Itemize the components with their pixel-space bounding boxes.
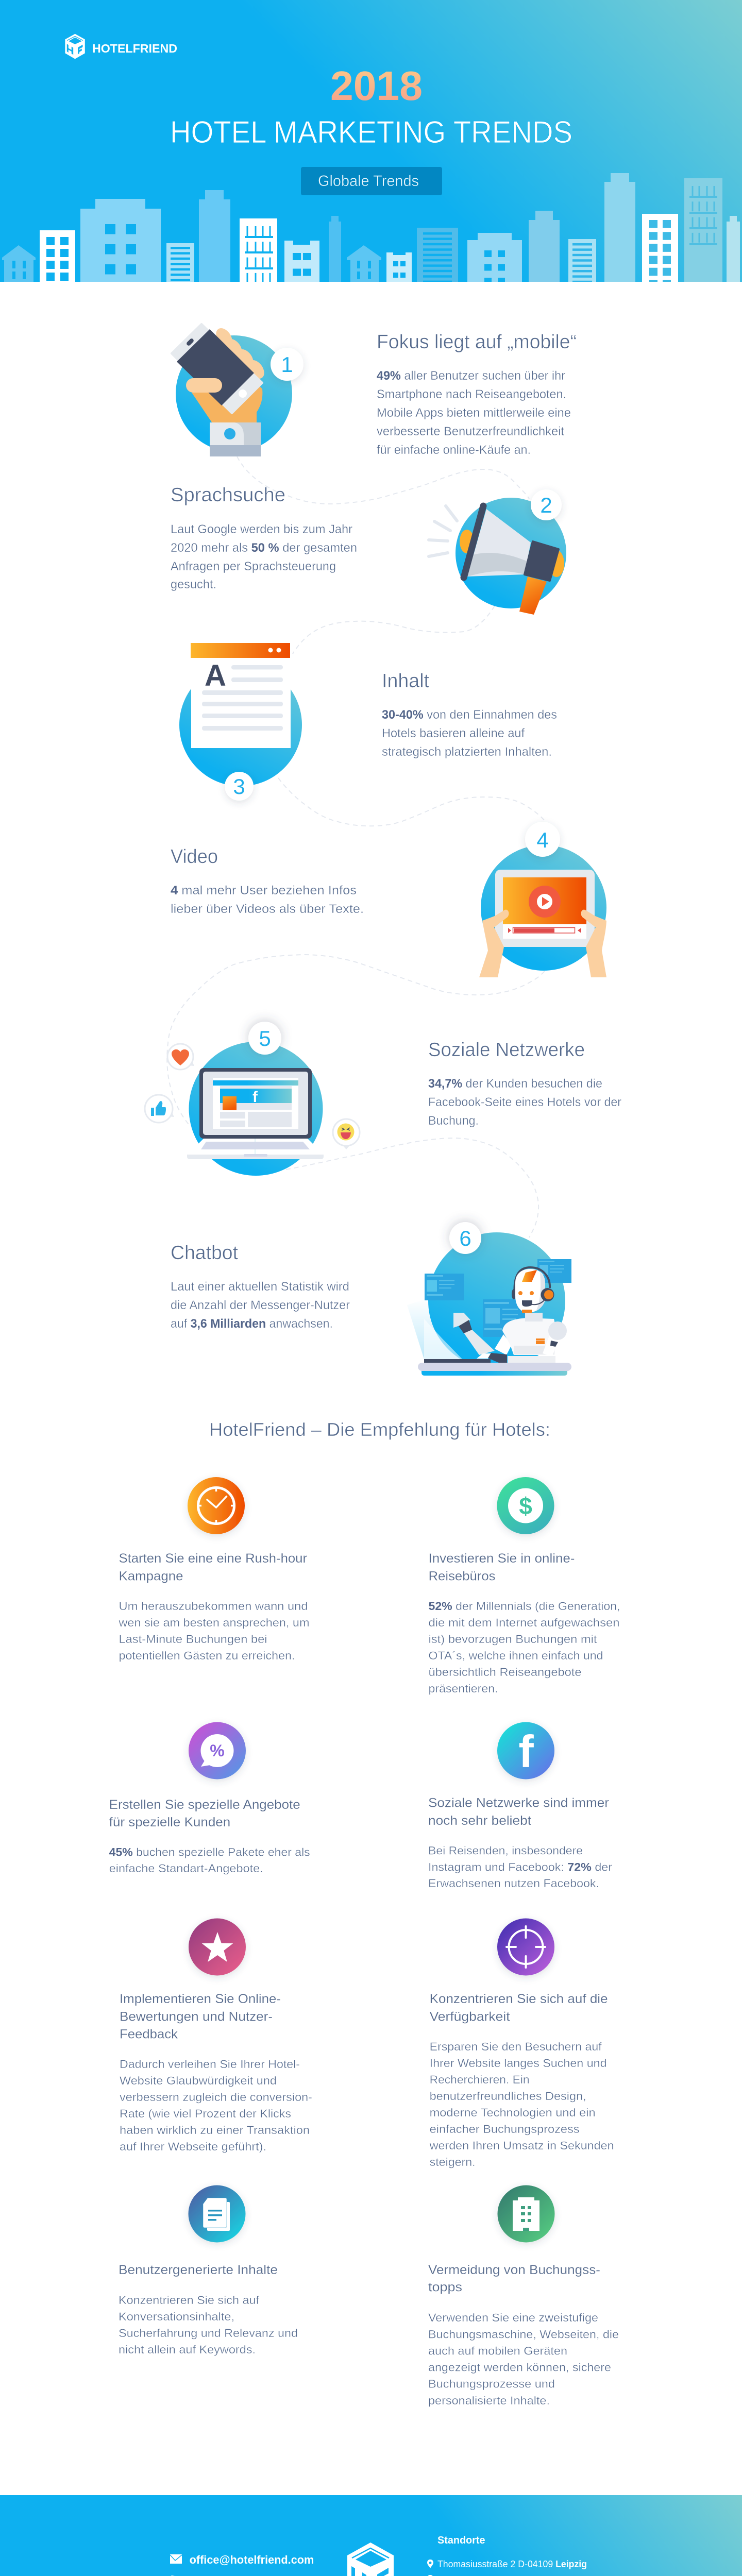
text block: präsentieren. bbox=[429, 1682, 498, 1695]
text block: strategisch platzierten Inhalten. bbox=[382, 745, 552, 759]
panel: trend 3 Inhalt bbox=[179, 643, 557, 801]
text block: Buchung. bbox=[428, 1114, 479, 1128]
heading: Vermeidung von Buchungss- bbox=[428, 2263, 600, 2277]
text block: Smartphone nach Reiseangeboten. bbox=[377, 387, 566, 401]
heading: recommendations: HotelFriend – Die Empfehlung für Hotels: bbox=[209, 1419, 550, 1440]
number badge 5 bbox=[248, 1022, 281, 1055]
logo: HotelFriend bbox=[65, 34, 177, 59]
text block: wen sie am besten ansprechen, um bbox=[118, 1616, 309, 1629]
number badge 4 bbox=[525, 822, 560, 857]
illustration: tablet with video bbox=[479, 845, 606, 977]
text block: lieber über Videos als über Texte. bbox=[171, 902, 364, 916]
text block: gesucht. bbox=[171, 578, 216, 591]
text block: Sucherfahrung und Relevanz und bbox=[119, 2327, 298, 2340]
text block: die mit dem Internet aufgewachsen bbox=[429, 1616, 619, 1629]
text block: 34,7% der Kunden besuchen die bbox=[428, 1077, 602, 1091]
text block bbox=[118, 1600, 309, 1662]
number badge 1: 1 bbox=[281, 352, 293, 377]
text block: Konzentrieren Sie sich auf bbox=[119, 2294, 260, 2307]
text block: Mobile Apps bieten mittlerweile eine bbox=[377, 406, 571, 420]
text block: Verwenden Sie eine zweistufige bbox=[428, 2311, 598, 2324]
text block bbox=[120, 2058, 312, 2153]
text block: Laut einer aktuellen Statistik wird bbox=[171, 1280, 349, 1294]
panel: recommendation availability bbox=[429, 1919, 614, 2168]
text block: Erwachsenen nutzen Facebook. bbox=[428, 1877, 599, 1890]
text block: moderne Technologien und ein bbox=[430, 2106, 596, 2119]
text block: 30-40% von den Einnahmen des bbox=[382, 708, 557, 722]
locations heading: Standorte bbox=[437, 2535, 485, 2546]
heading: Benutzergenerierte Inhalte bbox=[119, 2263, 278, 2277]
text block: Instagram und Facebook: 72% der bbox=[428, 1861, 612, 1874]
year: 2018 bbox=[330, 63, 423, 109]
heading bbox=[109, 1798, 300, 1829]
text block: einfacher Buchungsprozess bbox=[430, 2123, 580, 2136]
text block: Website Glaubwürdigkeit und bbox=[120, 2074, 277, 2087]
text block: für einfache online-Käufe an. bbox=[377, 443, 531, 457]
text block: Recherchieren. Ein bbox=[430, 2073, 530, 2086]
text block bbox=[429, 1600, 620, 1695]
illustration: chatbot robot at desk bbox=[407, 1232, 571, 1376]
text block: angezeigt werden können, sichere bbox=[428, 2361, 611, 2374]
icon: percent bubble bbox=[189, 1722, 246, 1780]
icon: percent bubble: % bbox=[210, 1741, 225, 1760]
text block: potentiellen Gästen zu erreichen. bbox=[119, 1649, 295, 1662]
heading: Fokus liegt auf „mobile“ bbox=[377, 331, 577, 353]
text block: 2020 mehr als 50 % der gesamten bbox=[171, 541, 357, 555]
button: Globale Trends bbox=[301, 167, 442, 195]
heading: Video bbox=[171, 846, 218, 868]
heading: Investieren Sie in online- bbox=[429, 1551, 575, 1566]
illustration: document: A bbox=[205, 659, 226, 692]
text block: Buchungsmaschine, Webseiten, die bbox=[428, 2328, 619, 2341]
icon: facebook bbox=[497, 1722, 554, 1780]
text block: 52% der Millennials (die Generation, bbox=[429, 1600, 620, 1613]
connector dashes bbox=[167, 456, 545, 1238]
heading bbox=[428, 1796, 609, 1828]
panel: trend 6 Chatbot bbox=[171, 1222, 571, 1376]
text block: Ihrer Website langes Suchen und bbox=[430, 2057, 607, 2070]
panel: recommendation user-generated content bbox=[119, 2185, 298, 2356]
text block bbox=[428, 2311, 619, 2407]
icon: thumb bubble bbox=[145, 1095, 174, 1123]
panel: recommendation online travel agencies bbox=[429, 1477, 620, 1695]
heading: Soziale Netzwerke bbox=[428, 1039, 585, 1061]
text block bbox=[171, 884, 364, 916]
heading bbox=[120, 1992, 281, 2042]
icon: laughing emoji bubble bbox=[333, 1119, 360, 1149]
text block: Konversationsinhalte, bbox=[119, 2310, 234, 2323]
text block: übersichtlich Reiseangebote bbox=[429, 1666, 581, 1679]
text block: Hotels basieren alleine auf bbox=[382, 726, 525, 740]
number badge 1 bbox=[271, 348, 303, 381]
skyline bbox=[2, 173, 740, 282]
heading bbox=[429, 1551, 575, 1584]
heading: Inhalt bbox=[382, 670, 429, 692]
text block: benutzerfreundliches Design, bbox=[430, 2090, 586, 2103]
icon: clock bbox=[188, 1477, 245, 1534]
text block: verbesserte Benutzerfreundlichkeit bbox=[377, 425, 564, 438]
heading: Konzentrieren Sie sich auf die bbox=[430, 1992, 608, 2006]
text block: auf 3,6 Milliarden anwachsen. bbox=[171, 1317, 333, 1331]
heading: noch sehr beliebt bbox=[428, 1814, 531, 1828]
heading bbox=[428, 2263, 600, 2295]
text block: auf Ihrer Webseite geführt). bbox=[120, 2140, 266, 2153]
illustration: laptop with Facebook page: f bbox=[252, 1089, 258, 1106]
text block: werden Ihren Umsatz in Sekunden bbox=[429, 2139, 614, 2152]
illustration: document bbox=[179, 643, 302, 786]
logo: HF cube bbox=[347, 2543, 394, 2576]
panel: recommendation social networks bbox=[428, 1722, 612, 1890]
panel: trend 4 Video bbox=[171, 822, 606, 977]
panel: recommendation booking stops bbox=[428, 2185, 619, 2407]
text block: Bei Reisenden, insbesondere bbox=[428, 1844, 583, 1857]
text block: Laut Google werden bis zum Jahr bbox=[171, 522, 352, 536]
text block: 49% aller Benutzer suchen über ihr bbox=[377, 369, 565, 383]
text block bbox=[429, 2040, 614, 2168]
illustration: megaphone bbox=[429, 498, 566, 615]
text block: Anfragen per Sprachsteuerung bbox=[171, 560, 336, 573]
text block bbox=[428, 1077, 621, 1128]
heading: Bewertungen und Nutzer- bbox=[120, 2009, 273, 2024]
text block bbox=[171, 1280, 350, 1331]
heading bbox=[119, 1551, 307, 1584]
text block: einfache Standart-Angebote. bbox=[109, 1862, 263, 1875]
heading: Soziale Netzwerke sind immer bbox=[428, 1796, 609, 1810]
text block: Facebook-Seite eines Hotels vor der bbox=[428, 1095, 621, 1109]
heading: Chatbot bbox=[171, 1242, 238, 1264]
text block: Ersparen Sie den Besuchern auf bbox=[430, 2040, 602, 2053]
heading: topps bbox=[428, 2280, 462, 2295]
text block: die Anzahl der Messenger-Nutzer bbox=[171, 1298, 350, 1312]
icon: heart bubble bbox=[167, 1044, 194, 1070]
number badge 5: 5 bbox=[259, 1026, 271, 1050]
panel: footer bbox=[0, 2495, 742, 2576]
icon: star bbox=[189, 1919, 246, 1975]
icon: documents bbox=[189, 2185, 245, 2242]
number badge 4: 4 bbox=[536, 828, 549, 852]
illustration: laptop with Facebook page bbox=[187, 1042, 324, 1176]
number badge 6 bbox=[449, 1222, 481, 1254]
heading: Sprachsuche bbox=[171, 484, 285, 506]
heading: Starten Sie eine eine Rush-hour bbox=[119, 1551, 307, 1566]
icon: dollar: $ bbox=[519, 1493, 532, 1519]
heading: für spezielle Kunden bbox=[109, 1815, 230, 1829]
text block: Buchungsprozesse und bbox=[428, 2378, 555, 2391]
text block: steigern. bbox=[430, 2156, 476, 2168]
text block: personalisierte Inhalte. bbox=[428, 2394, 550, 2407]
text block: Um herauszubekommen wann und bbox=[119, 1600, 308, 1613]
text block: 4 mal mehr User beziehen Infos bbox=[171, 884, 357, 897]
illustration: hand holding phone bbox=[172, 324, 292, 456]
text block bbox=[109, 1845, 310, 1875]
location: Leipzig: Thomasiusstraße 2 D-04109 Leipzig bbox=[437, 2559, 587, 2569]
heading: Reisebüros bbox=[429, 1569, 496, 1584]
heading: Verfügbarkeit bbox=[430, 2009, 510, 2024]
text block: Rate (wie viel Prozent der Klicks bbox=[120, 2107, 291, 2120]
logo wordmark: HOTELFRIEND bbox=[92, 42, 177, 55]
panel: trend 5 Soziale Netzwerke bbox=[145, 1022, 621, 1176]
heading bbox=[430, 1992, 608, 2024]
text block: ist) bevorzugen Buchungen mit bbox=[429, 1633, 597, 1646]
text block: haben wirklich zu einer Transaktion bbox=[120, 2124, 310, 2137]
text block: 45% buchen spezielle Pakete eher als bbox=[109, 1845, 310, 1859]
number badge 3: 3 bbox=[233, 774, 245, 799]
location: Berlin bbox=[427, 2575, 582, 2576]
text block bbox=[377, 369, 571, 457]
panel: trend 1 mobile bbox=[172, 324, 577, 457]
text block: nicht allein auf Keywords. bbox=[119, 2343, 256, 2356]
button: Globale Trends: Globale Trends bbox=[318, 173, 419, 190]
number badge 3 bbox=[225, 772, 254, 801]
heading: Implementieren Sie Online- bbox=[120, 1992, 281, 2006]
text block: auch auf mobilen Geräten bbox=[428, 2345, 567, 2358]
icon: building bbox=[498, 2185, 554, 2242]
heading: Feedback bbox=[120, 2027, 178, 2042]
panel: trend 2 Sprachsuche bbox=[171, 484, 566, 615]
text block: Dadurch verleihen Sie Ihrer Hotel- bbox=[120, 2058, 300, 2071]
icon: dollar bbox=[497, 1477, 554, 1534]
heading: Kampagne bbox=[119, 1569, 183, 1584]
number badge 6: 6 bbox=[459, 1226, 471, 1250]
contact: email: office@hotelfriend.com bbox=[190, 2553, 314, 2566]
text block: verbessern zugleich die conversion- bbox=[120, 2091, 312, 2104]
text block bbox=[382, 708, 557, 759]
panel: header bbox=[0, 0, 742, 282]
text block bbox=[428, 1844, 612, 1890]
number badge 2 bbox=[531, 489, 562, 520]
number badge 2: 2 bbox=[540, 493, 552, 517]
panel: recommendation special offers bbox=[109, 1722, 310, 1875]
text block: Last-Minute Buchungen bei bbox=[119, 1633, 267, 1646]
text block bbox=[171, 522, 357, 591]
heading: Erstellen Sie spezielle Angebote bbox=[109, 1798, 300, 1812]
text block: OTA´s, welche ihnen einfach und bbox=[429, 1649, 603, 1662]
icon: facebook: f bbox=[518, 1726, 534, 1777]
panel: recommendation reviews bbox=[120, 1919, 312, 2153]
panel: recommendation rush-hour bbox=[118, 1477, 309, 1662]
icon: target bbox=[497, 1919, 554, 1975]
text block bbox=[119, 2294, 298, 2356]
title: HOTEL MARKETING TRENDS bbox=[170, 115, 572, 149]
